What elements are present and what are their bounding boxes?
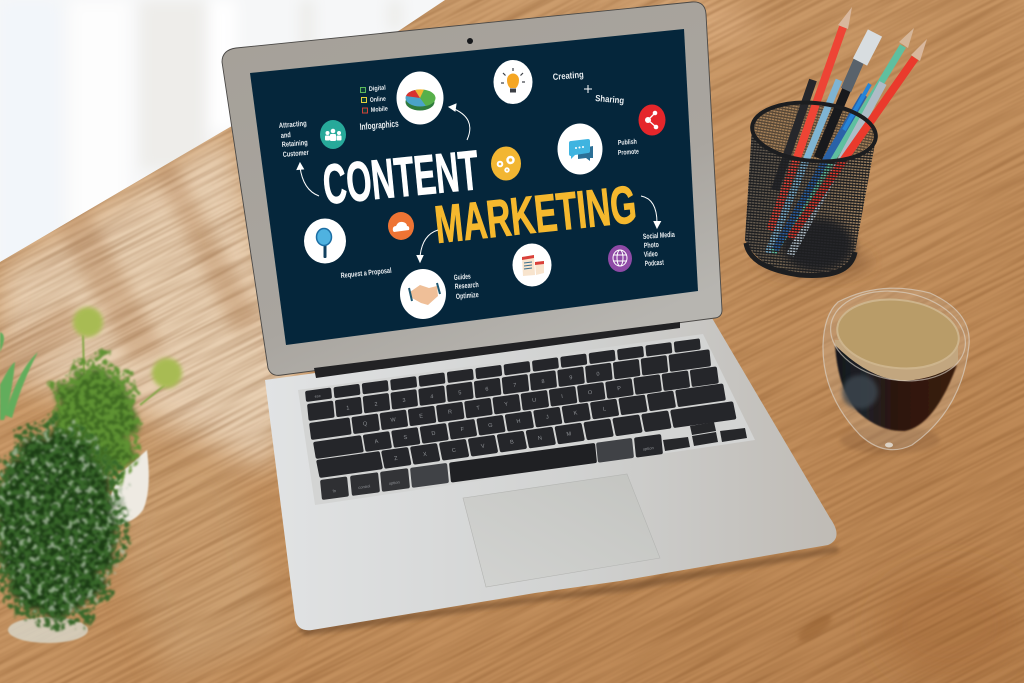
guides text [453, 272, 479, 301]
qwerty row: O [588, 390, 593, 396]
lower dark-green plant [0, 419, 128, 631]
keyboard [305, 338, 747, 500]
qwerty row: T [476, 405, 481, 412]
holder back interior [752, 98, 876, 164]
holder base ring [746, 243, 855, 276]
flower heads [73, 307, 182, 388]
glass bottom highlight [885, 442, 893, 448]
home row: G [488, 423, 493, 429]
number row: 5 [458, 390, 462, 397]
arrow keys [663, 422, 747, 451]
shift row: Z [394, 456, 399, 462]
number row: 7 [513, 383, 517, 389]
hinge [314, 322, 680, 378]
clear blue pen [768, 80, 839, 253]
request a proposal label: Request a Proposal [340, 266, 392, 280]
holder shadow [760, 246, 870, 278]
glass rim [823, 281, 973, 391]
arrow to handshake [417, 230, 438, 262]
guides text: Guides [453, 272, 471, 282]
attracting and retaining text: Customer [282, 148, 309, 159]
coffee reflection [842, 375, 878, 409]
pencil tip red back [838, 7, 852, 29]
magnifier icon [304, 218, 346, 264]
pen holder with pens [740, 7, 927, 280]
globe icon [608, 245, 632, 272]
webcam [467, 38, 473, 44]
shift row: C [451, 448, 457, 454]
attracting and retaining text [278, 119, 309, 159]
function row: esc [314, 393, 321, 399]
curtain window background [0, 0, 1024, 300]
bottom row: option [643, 445, 654, 452]
holder back mesh [752, 98, 876, 164]
qwerty row: U [532, 398, 537, 404]
qwerty row: R [448, 409, 453, 416]
pie chart icon [396, 72, 444, 124]
home row: F [460, 427, 465, 433]
wood knot [798, 616, 832, 640]
number row: 3 [402, 398, 406, 404]
gears icon [491, 146, 521, 180]
arrow to pie chart [449, 104, 470, 140]
publish promote text [618, 139, 639, 157]
shift row: X [423, 452, 428, 458]
bottom row: control [358, 483, 371, 490]
qwerty row: P [617, 386, 622, 392]
upper light-green plant [49, 353, 141, 497]
number row: 0 [596, 371, 600, 378]
social media text [643, 230, 676, 268]
attracting and retaining text: and [280, 130, 291, 140]
white plant pots [8, 450, 149, 643]
arrow to social media [641, 196, 660, 228]
marker clear cap [860, 33, 875, 62]
attracting and retaining text: Attracting [278, 119, 307, 130]
bottom row: fn [332, 488, 336, 493]
social media text: Podcast [645, 258, 664, 268]
qwerty row: W [390, 417, 397, 424]
arrow to audience [297, 163, 319, 196]
black pen [775, 80, 813, 190]
home row: H [516, 419, 521, 425]
screen [250, 29, 698, 345]
holder body backing [745, 127, 876, 276]
checklist: Online [370, 96, 386, 104]
flower stems [83, 335, 165, 405]
cloud icon [388, 212, 414, 240]
number row: 6 [485, 386, 489, 393]
share icon [638, 104, 666, 136]
creating plus sharing: Creating [552, 69, 584, 82]
shift row: V [481, 443, 486, 450]
cup shadow [840, 426, 940, 454]
heading: marketing: MARKETING [432, 175, 639, 255]
screen background [250, 29, 698, 345]
plant stems and flowers [0, 307, 182, 420]
marker grey section [846, 58, 860, 90]
pencil tip red front [911, 39, 927, 61]
coffee cup [823, 281, 973, 454]
home row [313, 383, 726, 459]
audience icon [320, 120, 346, 149]
heading: content: CONTENT [320, 138, 481, 216]
guides text: Research [454, 280, 479, 291]
crema front band [835, 340, 958, 381]
number row: 8 [541, 379, 545, 385]
blue pen clip [844, 84, 870, 130]
number row [307, 349, 711, 421]
red pencil back [770, 27, 843, 230]
dark coffee [835, 345, 957, 431]
home row: S [403, 435, 408, 441]
infographics label: Infographics [359, 119, 399, 133]
left grass leaves [0, 332, 38, 420]
shift row: B [510, 439, 515, 446]
window shadow bands [0, 155, 262, 395]
number row: 1 [346, 405, 350, 412]
creating plus sharing: Sharing [595, 93, 625, 106]
green pencil [773, 46, 903, 253]
guides text: Optimize [455, 290, 479, 301]
checklist: Mobile [371, 106, 388, 114]
number row: 4 [430, 394, 434, 400]
red pencil front [790, 58, 915, 238]
home row: L [603, 406, 607, 413]
qwerty row: Q [363, 421, 368, 428]
laptop lid [222, 2, 722, 375]
qwerty row: Y [504, 401, 509, 408]
number row: 9 [569, 375, 573, 381]
shift row [316, 401, 737, 478]
holder mesh body [745, 134, 874, 273]
home row: A [374, 439, 379, 445]
function row [305, 338, 701, 402]
laptop [222, 2, 838, 636]
holder rim [750, 98, 878, 166]
social media text: Social Media [643, 230, 676, 241]
qwerty row: I [561, 394, 564, 400]
holder floor shadow [782, 218, 854, 272]
silver clear pen [790, 83, 883, 255]
social media text: Photo [644, 240, 659, 250]
handshake icon [400, 269, 446, 319]
laptop base [265, 318, 837, 630]
keyboard well [298, 334, 755, 505]
home row: J [546, 415, 550, 421]
home row: K [573, 410, 578, 417]
documents icon [512, 244, 552, 286]
checklist [360, 85, 388, 114]
black capped marker [818, 86, 848, 158]
home row: D [431, 431, 436, 437]
qwerty row: E [419, 413, 424, 420]
chat icon [558, 124, 602, 174]
shift row: M [566, 431, 572, 438]
bottom row: option [389, 479, 400, 486]
pens [768, 7, 927, 255]
bottom row [320, 434, 663, 500]
number row: 2 [374, 402, 378, 408]
social media text: Video [644, 249, 658, 259]
trackpad [463, 474, 660, 587]
publish promote text: Promote [618, 149, 639, 157]
qwerty row [309, 366, 719, 440]
attracting and retaining text: Retaining [281, 138, 308, 149]
crema surface [834, 294, 962, 374]
base shadow [296, 546, 838, 636]
pencil tip green [899, 28, 914, 48]
blue pen [775, 95, 864, 250]
light bulb icon [494, 60, 532, 104]
checklist: Digital [369, 85, 386, 93]
creating plus sharing [552, 69, 625, 106]
glass outer wall [823, 288, 969, 450]
publish promote text: Publish [618, 139, 637, 147]
shift row: N [537, 435, 543, 442]
